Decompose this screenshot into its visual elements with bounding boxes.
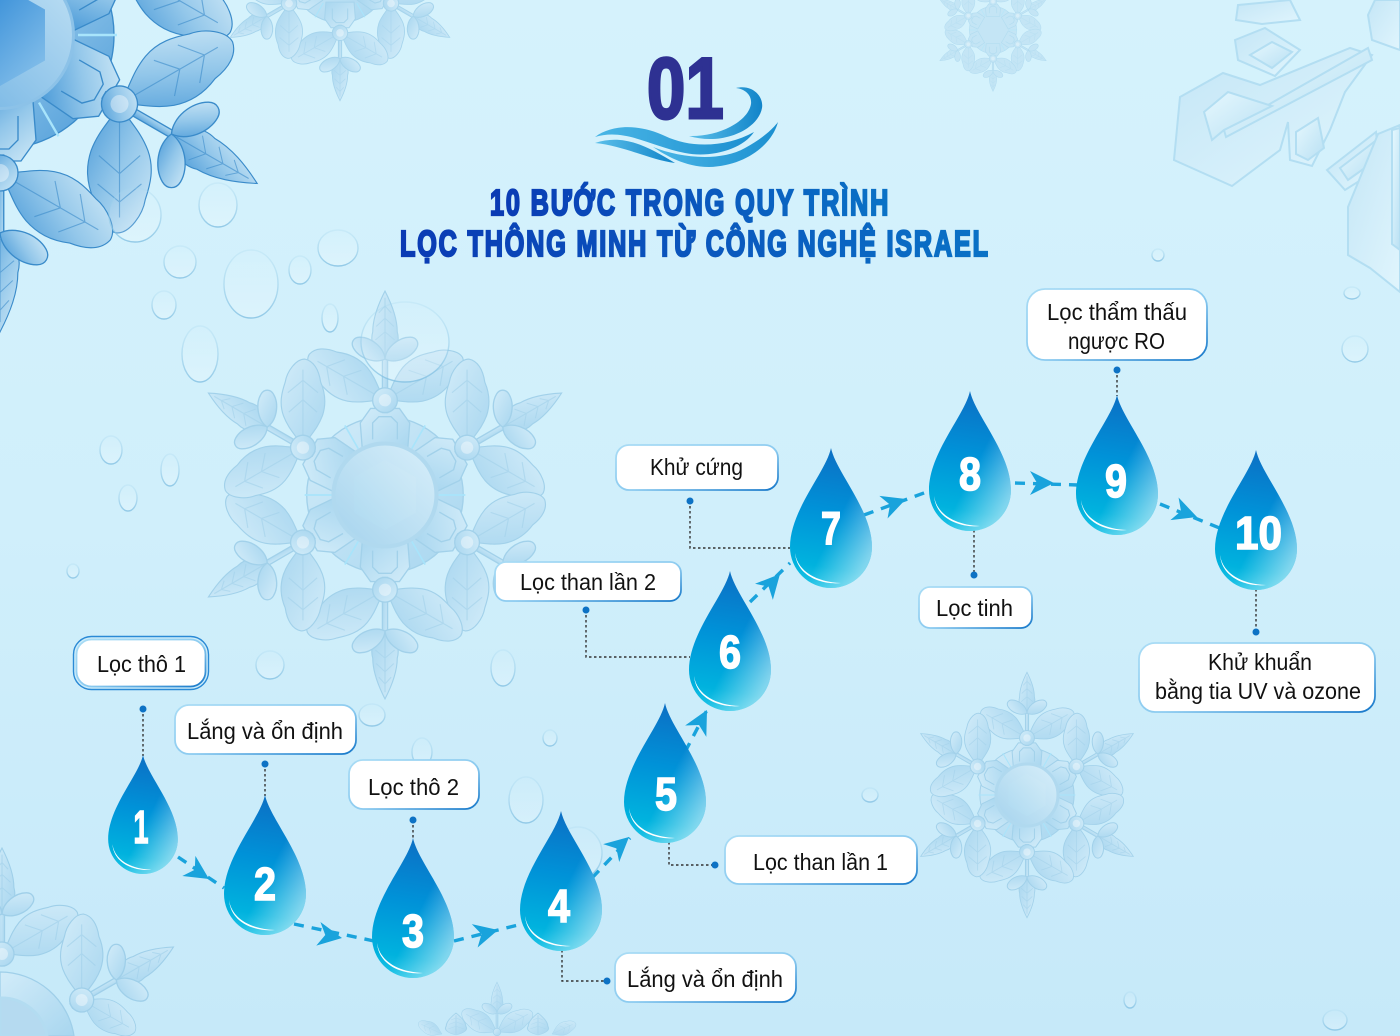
snowflake: bottom right	[894, 672, 1160, 918]
step 9 drop: 9	[1105, 455, 1127, 507]
label: Lắng và ổn định 1	[175, 705, 356, 754]
step 3 drop: 3	[402, 905, 424, 957]
step 2 drop	[224, 795, 306, 935]
connector 4	[562, 950, 610, 984]
connector 9	[1114, 366, 1120, 396]
wave logo	[595, 87, 778, 167]
water droplets	[67, 183, 1368, 1030]
label: Lọc than lần 2	[495, 562, 681, 601]
section number: 01	[647, 41, 724, 137]
snowflake: top left vivid	[0, 0, 321, 332]
label: Lọc thẩm thấu ngược RO: ngược RO	[1068, 328, 1165, 354]
title: 10 BƯỚC TRONG QUY TRÌNH	[490, 181, 888, 223]
label: Lắng và ổn định 1: Lắng và ổn định	[187, 718, 343, 744]
label: Khử khuẩn bằng tia UV và ozone: Khử khuẩn	[1208, 649, 1312, 675]
connector 8	[970, 530, 978, 578]
step 3 drop	[372, 838, 454, 978]
snowflake: bottom left	[0, 848, 204, 1036]
arrow 5 to 6	[685, 704, 718, 752]
title: LỌC THÔNG MINH TỪ CÔNG NGHỆ ISRAEL	[400, 222, 988, 264]
label: Lắng và ổn định 2: Lắng và ổn định	[627, 966, 783, 992]
connector 2	[262, 760, 268, 796]
step 1 drop	[108, 755, 178, 874]
snowflake: top right pale	[927, 0, 1059, 91]
ice crystal: top right	[1174, 0, 1400, 292]
step 10 drop: 10	[1235, 507, 1282, 559]
arrow 3 to 4	[454, 918, 522, 947]
step 9 drop	[1076, 395, 1158, 535]
label: Lọc thô 2	[349, 760, 479, 809]
arrow 9 to 10	[1160, 498, 1222, 529]
label: Lọc tinh: Lọc tinh	[936, 595, 1013, 621]
label: Khử cứng	[616, 445, 778, 490]
connector 7	[686, 498, 790, 548]
step 7 drop	[790, 448, 872, 588]
step 4 drop	[520, 811, 602, 951]
label: Lọc thô 1	[74, 636, 208, 690]
snowflake: center large	[165, 291, 605, 699]
snowflake: bottom center	[416, 982, 578, 1036]
step 10 drop	[1215, 450, 1297, 590]
arrow 7 to 8	[864, 488, 932, 518]
connector 6	[582, 606, 690, 657]
step 1 drop: 1	[134, 801, 148, 853]
step 5 drop	[624, 703, 706, 843]
step 2 drop: 2	[254, 858, 276, 910]
label: Lọc than lần 1	[725, 836, 917, 884]
label: Lọc thẩm thấu ngược RO	[1027, 289, 1207, 360]
arrow 4 to 5	[592, 828, 637, 878]
label: Khử khuẩn bằng tia UV và ozone: bằng tia UV và ozone	[1155, 678, 1361, 704]
label: Lắng và ổn định 2	[615, 953, 796, 1002]
label: Khử cứng: Khử cứng	[650, 454, 743, 480]
label: Khử khuẩn bằng tia UV và ozone	[1139, 643, 1375, 712]
label: Lọc than lần 2: Lọc than lần 2	[520, 569, 656, 595]
step 7 drop: 7	[821, 502, 841, 554]
label: Lọc thô 1: Lọc thô 1	[97, 651, 186, 677]
step 5 drop: 5	[655, 768, 677, 820]
title	[400, 181, 988, 264]
connector 5	[669, 842, 718, 868]
label: Lọc thẩm thấu ngược RO: Lọc thẩm thấu	[1047, 299, 1187, 325]
step 8 drop: 8	[959, 448, 981, 500]
connector 10	[1252, 589, 1260, 636]
step 6 drop	[689, 571, 771, 711]
arrow 2 to 3	[294, 922, 374, 950]
step 6 drop: 6	[719, 626, 741, 678]
connector 1	[140, 706, 146, 756]
snowflake: top pale	[203, 0, 477, 101]
arrow 1 to 2	[178, 856, 224, 889]
label: Lọc tinh	[919, 587, 1032, 628]
connector 3	[410, 816, 416, 839]
label: Lọc thô 2: Lọc thô 2	[368, 774, 459, 800]
label: Lọc than lần 1: Lọc than lần 1	[753, 849, 888, 875]
step 4 drop: 4	[548, 880, 570, 932]
step 8 drop	[929, 391, 1011, 531]
arrow 6 to 7	[750, 563, 790, 602]
arrow 8 to 9	[1015, 471, 1078, 495]
